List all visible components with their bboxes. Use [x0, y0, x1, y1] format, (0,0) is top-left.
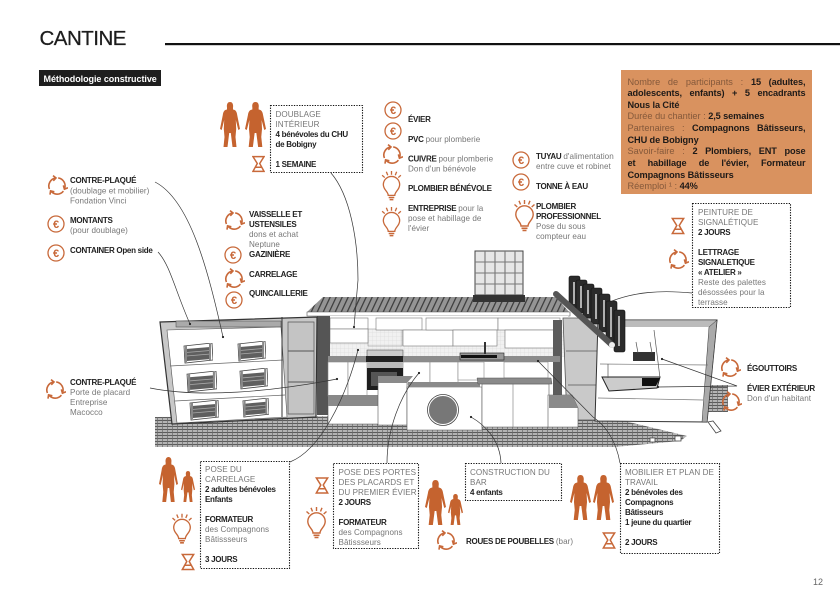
- box: construction du bar: CONSTRUCTION DU: [470, 468, 550, 477]
- leader lines: [150, 173, 737, 463]
- materials: top left: CONTRE-PLAQUÉ: [70, 176, 137, 185]
- materials: exterior sink: ÉGOUTTOIRS: [747, 364, 798, 373]
- box: pose des portes: DES PLACARDS ET: [338, 478, 414, 487]
- box: pose des portes: Bâtissseurs: [338, 538, 381, 547]
- section label: Méthodologie constructive: [44, 74, 157, 84]
- box: pose des portes: des Compagnons: [338, 528, 403, 537]
- box: mobilier et plan de travail: TRAVAIL: [625, 478, 658, 487]
- box: pose du carrelage: POSE DU: [205, 465, 242, 474]
- box: pose des portes: FORMATEUR: [338, 518, 387, 527]
- deck feet: [650, 421, 721, 442]
- box: pose du carrelage: CARRELAGE: [205, 475, 256, 484]
- materials: top left: [48, 176, 153, 261]
- materials: kitchen fittings: dons et achat: [249, 230, 299, 239]
- right door: [563, 318, 598, 420]
- page number: 12: [813, 577, 823, 587]
- box: signaletique: terrasse: [698, 298, 728, 307]
- left door: [160, 317, 317, 424]
- box: pose des portes: POSE DES PORTES: [338, 468, 417, 477]
- stove: [367, 350, 403, 357]
- materials: plumbing column: l'évier: [408, 224, 429, 233]
- box: pose du carrelage: Enfants: [205, 495, 233, 504]
- section label: [39, 70, 161, 86]
- materials: top left: Fondation Vinci: [70, 196, 127, 206]
- interior back wall: [320, 316, 568, 416]
- box: signaletique: PEINTURE DE: [698, 208, 754, 217]
- box: pose du carrelage: 2 adultes bénévoles: [205, 485, 277, 494]
- pallet crates: [184, 343, 213, 363]
- materials: exterior sink: [721, 358, 815, 414]
- materials: kitchen fittings: VAISSELLE ET: [249, 210, 302, 219]
- materials: bottom left: Porte de placard: [70, 388, 130, 397]
- materials: kitchen fittings: GAZINIÈRE: [249, 250, 291, 259]
- box: signaletique: [669, 204, 790, 308]
- summary box: Nombre de participants : 15 (adultes,: [628, 76, 805, 86]
- box: signaletique: Reste des palettes: [698, 278, 766, 287]
- materials: water supply: Pose du sous: [536, 222, 586, 231]
- summary box: [621, 70, 812, 194]
- box: construction du bar: BAR: [470, 478, 487, 487]
- box: doublage interieur: de Bobigny: [276, 140, 317, 149]
- materials: water supply: €: [518, 177, 524, 189]
- box: mobilier et plan de travail: MOBILIER ET PLAN DE: [625, 468, 715, 477]
- materials: bottom left: Macocco: [70, 408, 103, 417]
- box: construction du bar: [425, 464, 573, 553]
- box: construction du bar: 4 enfants: [470, 488, 503, 497]
- box: signaletique: SIGNALETIQUE: [698, 258, 756, 267]
- materials: exterior sink: ÉVIER EXTÉRIEUR: [747, 384, 815, 393]
- box: pose des portes: DU PREMIER ÉVIER: [338, 488, 417, 497]
- rolled palettes: [569, 276, 625, 352]
- title rule: [165, 43, 840, 45]
- materials: water supply: TONNE À EAU: [536, 182, 588, 191]
- materials: water supply: compteur eau: [536, 232, 586, 241]
- materials: top left: (doublage et mobilier): [70, 186, 150, 196]
- materials: water supply: PROFESSIONNEL: [536, 212, 601, 221]
- materials: top left: €: [53, 219, 59, 231]
- box: mobilier et plan de travail: Bâtisseurs: [625, 508, 664, 517]
- materials: water supply: PLOMBIER: [536, 202, 576, 211]
- right pallets: [708, 385, 728, 412]
- materials: kitchen fittings: CARRELAGE: [249, 270, 298, 279]
- materials: kitchen fittings: USTENSILES: [249, 220, 297, 229]
- materials: plumbing column: pose et habillage de: [408, 214, 482, 223]
- materials: kitchen fittings: [225, 210, 309, 308]
- box: pose du carrelage: des Compagnons: [205, 525, 269, 534]
- materials: bottom left: CONTRE-PLAQUÉ: [70, 378, 137, 387]
- materials: kitchen fittings: €: [231, 295, 237, 307]
- materials: water supply: €: [518, 155, 524, 167]
- materials: kitchen fittings: Neptune: [249, 240, 280, 249]
- box: pose des portes: 2 JOURS: [338, 498, 372, 507]
- box: mobilier et plan de travail: 2 JOURS: [625, 538, 658, 547]
- summary box: Durée du chantier : 2,5 semaines: [628, 111, 764, 121]
- summary box: adolescents, enfants) + 5 encadrants: [628, 88, 806, 98]
- materials: bottom left: Entreprise: [70, 398, 108, 407]
- materials: plumbing column: €: [390, 126, 396, 138]
- box: signaletique: LETTRAGE: [698, 248, 740, 257]
- summary box: Savoir-faire : 2 Plombiers, ENT pose: [628, 146, 806, 156]
- sink: [460, 353, 504, 360]
- summary box: Nous la Cité: [628, 100, 679, 110]
- box: mobilier et plan de travail: Compagnons: [625, 498, 674, 507]
- box: pose du carrelage: Bâtissseurs: [205, 535, 247, 544]
- summary box: Réemploi ¹ : 44%: [628, 181, 698, 191]
- materials: top left: €: [53, 248, 59, 260]
- worktop and lower cabinets: [328, 356, 560, 362]
- title: CANTINE: [40, 27, 126, 50]
- deck: [155, 415, 687, 447]
- box: pose du carrelage: FORMATEUR: [205, 515, 253, 524]
- materials: exterior sink: Don d'un habitant: [747, 394, 812, 403]
- dark side of container: [317, 316, 330, 415]
- isometric drawing of the container canteen: [155, 251, 728, 447]
- box: signaletique: désossées pour la: [698, 288, 765, 297]
- materials: plumbing column: Don d'un bénévole: [408, 164, 477, 174]
- box: construction du bar: ROUES DE POUBELLES (bar): [466, 537, 573, 546]
- summary box: Partenaires : Compagnons Bâtisseurs,: [628, 123, 806, 133]
- box: pose des portes: [306, 464, 418, 548]
- box: pose du carrelage: 3 JOURS: [205, 555, 238, 564]
- box: doublage interieur: INTÉRIEUR: [276, 120, 320, 129]
- box: doublage interieur: DOUBLAGE: [276, 110, 321, 119]
- materials: water supply: entre cuve et robinet: [536, 162, 612, 171]
- sink and rack: [602, 377, 660, 391]
- box: mobilier et plan de travail: 2 bénévoles des: [625, 488, 683, 497]
- materials: top left: MONTANTS: [70, 216, 113, 225]
- box: doublage interieur: 1 SEMAINE: [276, 160, 317, 169]
- bar: [328, 400, 379, 424]
- materials: plumbing column: CUIVRE pour plomberie: [408, 154, 494, 164]
- summary box: Compagnons Bâtisseurs: [628, 170, 734, 180]
- materials: plumbing column: ÉVIER: [408, 115, 431, 124]
- materials: plumbing column: €: [390, 105, 396, 117]
- water tank: [475, 251, 523, 295]
- box: signaletique: SIGNALÉTIQUE: [698, 218, 759, 227]
- materials: water supply: [513, 152, 614, 241]
- materials: plumbing column: ENTREPRISE pour la: [408, 204, 484, 213]
- materials: kitchen fittings: QUINCAILLERIE: [249, 289, 309, 298]
- materials: water supply: TUYAU d'alimentation: [536, 152, 614, 161]
- materials: kitchen fittings: €: [230, 250, 236, 262]
- box: mobilier et plan de travail: [570, 464, 720, 554]
- materials: bottom left: [46, 378, 137, 417]
- materials: plumbing column: [382, 102, 494, 236]
- summary box: CHU de Bobigny: [628, 135, 699, 145]
- materials: plumbing column: PLOMBIER BÉNÉVOLE: [408, 184, 493, 193]
- box: pose du carrelage: [159, 457, 290, 570]
- summary box: et habillage de l'évier, Formateur: [628, 158, 806, 168]
- roof: [307, 297, 570, 313]
- box: doublage interieur: 4 bénévoles du CHU: [276, 130, 348, 139]
- materials: top left: (pour doublage): [70, 226, 128, 235]
- box: signaletique: « ATELIER »: [698, 268, 742, 277]
- box: mobilier et plan de travail: 1 jeune du quartier: [625, 518, 691, 527]
- materials: plumbing column: PVC pour plomberie: [408, 135, 481, 144]
- pipe: [556, 294, 612, 345]
- materials: top left: CONTAINER Open side: [70, 246, 153, 255]
- box: signaletique: 2 JOURS: [698, 228, 731, 237]
- box: doublage interieur: [220, 102, 362, 172]
